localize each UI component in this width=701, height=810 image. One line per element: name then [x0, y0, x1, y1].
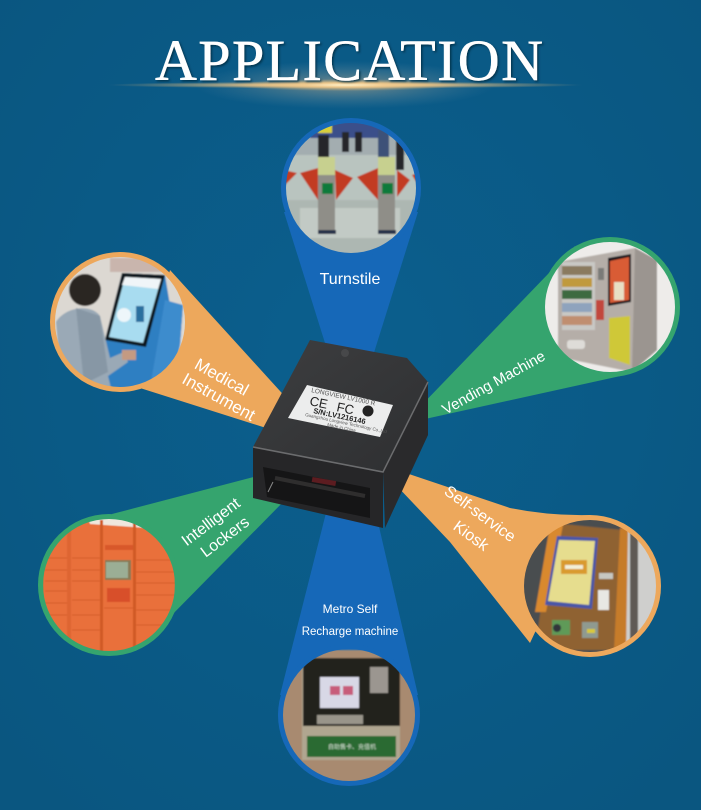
device top face — [253, 340, 428, 472]
device label — [288, 385, 393, 437]
device: barcode scanner — [253, 340, 428, 528]
photo: metro recharge machine: 自助售卡、充值机 — [328, 743, 376, 751]
device label: CE — [308, 393, 329, 412]
device label: FC — [335, 399, 355, 418]
photo: medical kiosk — [55, 257, 185, 387]
title: APPLICATION — [155, 28, 543, 93]
photo: vending machine — [545, 242, 675, 372]
scan window — [263, 467, 370, 518]
device label: S/N:LV1216146 — [313, 406, 367, 426]
label: Vending Machine: Vending Machine — [439, 348, 548, 418]
label: Medical Instrument: Medical — [191, 355, 252, 400]
title glow — [107, 61, 583, 109]
device front face — [253, 447, 383, 528]
beam: intelligent lockers — [38, 474, 290, 656]
label: Metro Self Recharge machine — [302, 602, 398, 638]
beam: metro self recharge machine — [278, 505, 420, 786]
device label: Made in China — [327, 422, 357, 433]
photo: self-service kiosk — [524, 520, 656, 652]
photo: lockers — [43, 518, 175, 655]
device label: LONGVIEW LV1000 R — [311, 387, 376, 408]
label: Intelligent Lockers: Intelligent — [179, 495, 244, 550]
beam: vending machine — [415, 237, 680, 419]
beam: self-service kiosk — [395, 471, 661, 657]
device right face — [383, 382, 428, 528]
beam: medical instrument — [50, 252, 290, 433]
label: Metro Self Recharge machine: Metro Self — [323, 602, 378, 616]
label: Metro Self Recharge machine: Recharge machine — [302, 626, 398, 638]
label: Intelligent Lockers: Lockers — [198, 514, 253, 561]
label: Medical Instrument: Instrument — [179, 369, 259, 425]
label: Self-service Kiosk: Self-service — [441, 483, 519, 546]
photo: turnstile — [284, 120, 420, 255]
device label: Guangzhou Longview Technology Co.,Ltd — [305, 412, 388, 434]
label: Turnstile: Turnstile — [320, 271, 380, 288]
beam: turnstile — [281, 118, 421, 375]
photo: metro recharge machine — [280, 650, 420, 785]
label: Self-service Kiosk: Kiosk — [450, 518, 492, 555]
